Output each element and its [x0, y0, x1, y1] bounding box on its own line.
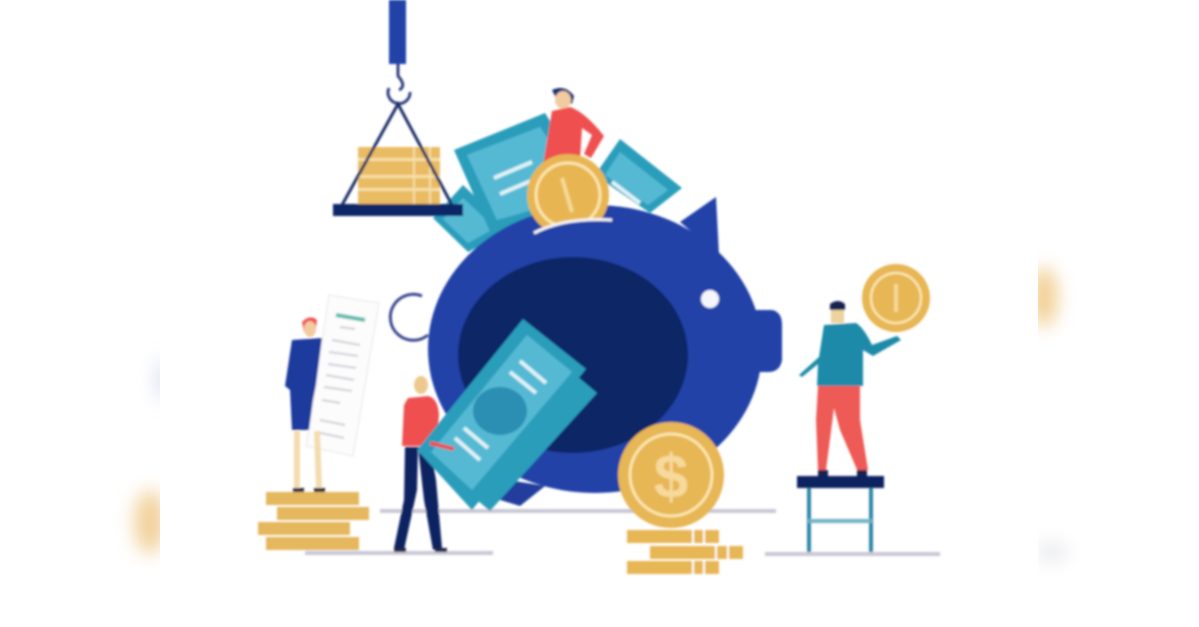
front banknote: [417, 319, 586, 510]
receipt: [306, 295, 379, 456]
figure: man with banknote: [394, 376, 447, 552]
ground lines: [305, 509, 940, 556]
coin stack left: [258, 492, 369, 550]
figure: woman with receipt: [285, 317, 325, 493]
figure: man with coin: [799, 301, 901, 476]
back bill: [432, 345, 597, 511]
pig tail: [390, 294, 428, 340]
held coin: [862, 264, 930, 332]
scale with coins: [333, 104, 463, 216]
back banknotes: [433, 113, 682, 252]
dollar coin: $: [654, 443, 688, 512]
pig body: [428, 197, 782, 506]
coin entering slot: [527, 154, 612, 240]
hoist with hook: [388, 0, 410, 104]
figure: woman on coin: [543, 88, 604, 165]
stool: [797, 476, 884, 552]
coin stack centre: [627, 530, 743, 574]
blurred side bands: [134, 267, 1068, 561]
dollar coin: [618, 422, 724, 528]
